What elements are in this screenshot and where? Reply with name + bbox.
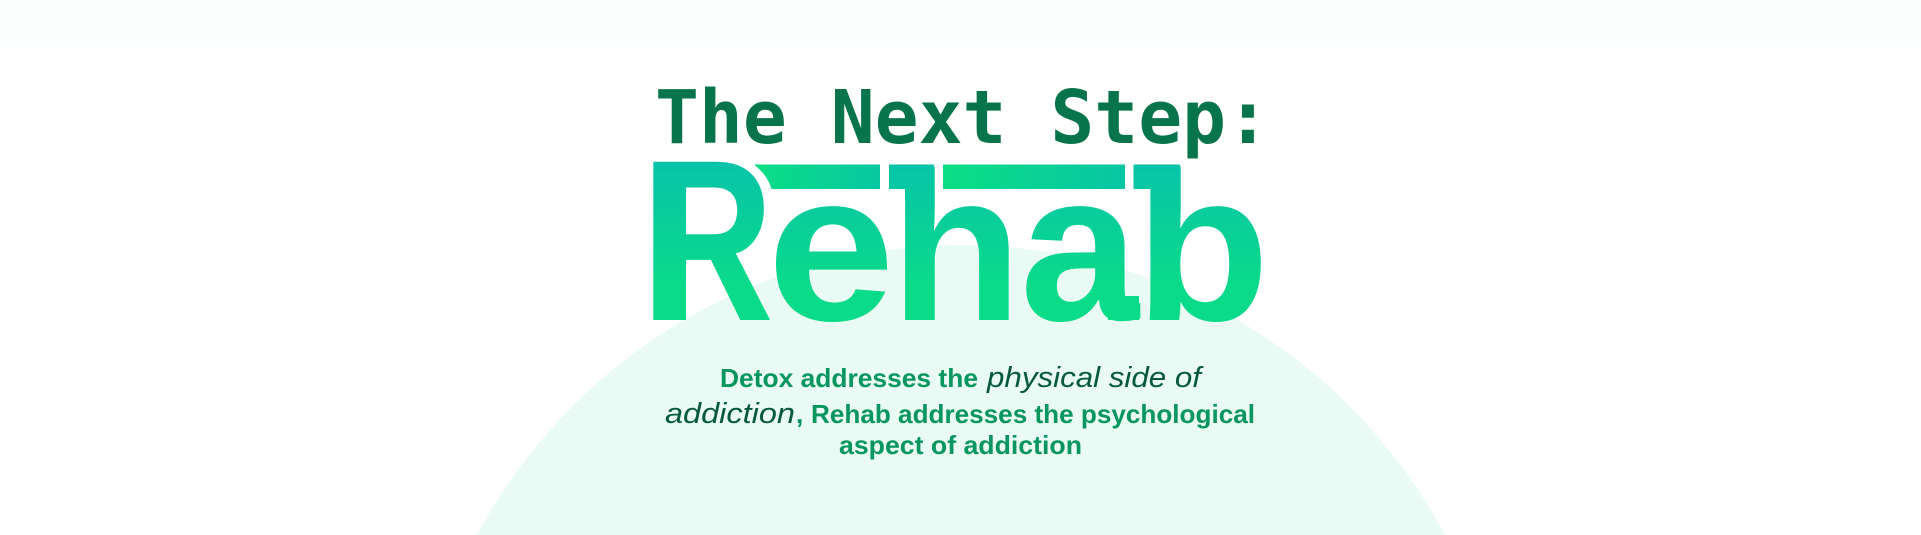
bar over a [943, 164, 1125, 189]
serif on h [889, 164, 934, 200]
line 2 bold: Rehab addresses the psychological [811, 399, 1255, 429]
heading letter R: R [641, 112, 774, 370]
line 3 bold: aspect of addiction [839, 430, 1082, 460]
tail on a [1108, 296, 1139, 320]
subtitle text block [665, 362, 1255, 460]
line 2 comma: , [796, 399, 803, 429]
line 2 italic: addiction [665, 398, 795, 430]
bar over e [754, 164, 880, 189]
line 1 bold: Detox addresses the [720, 363, 978, 393]
heading letter e: e [767, 128, 895, 365]
top background band [0, 0, 1921, 50]
heading letter b: b [1135, 128, 1270, 365]
heading: Rehab [641, 112, 1270, 370]
heading letter h: h [890, 129, 1022, 365]
line 1 italic: physical side of [986, 362, 1204, 394]
title: The Next Step:: The Next Step: [655, 75, 1270, 161]
stem of R [655, 163, 686, 320]
background semicircle [477, 245, 1445, 535]
serif on b [1134, 164, 1180, 200]
heading letter a: a [1020, 129, 1141, 366]
